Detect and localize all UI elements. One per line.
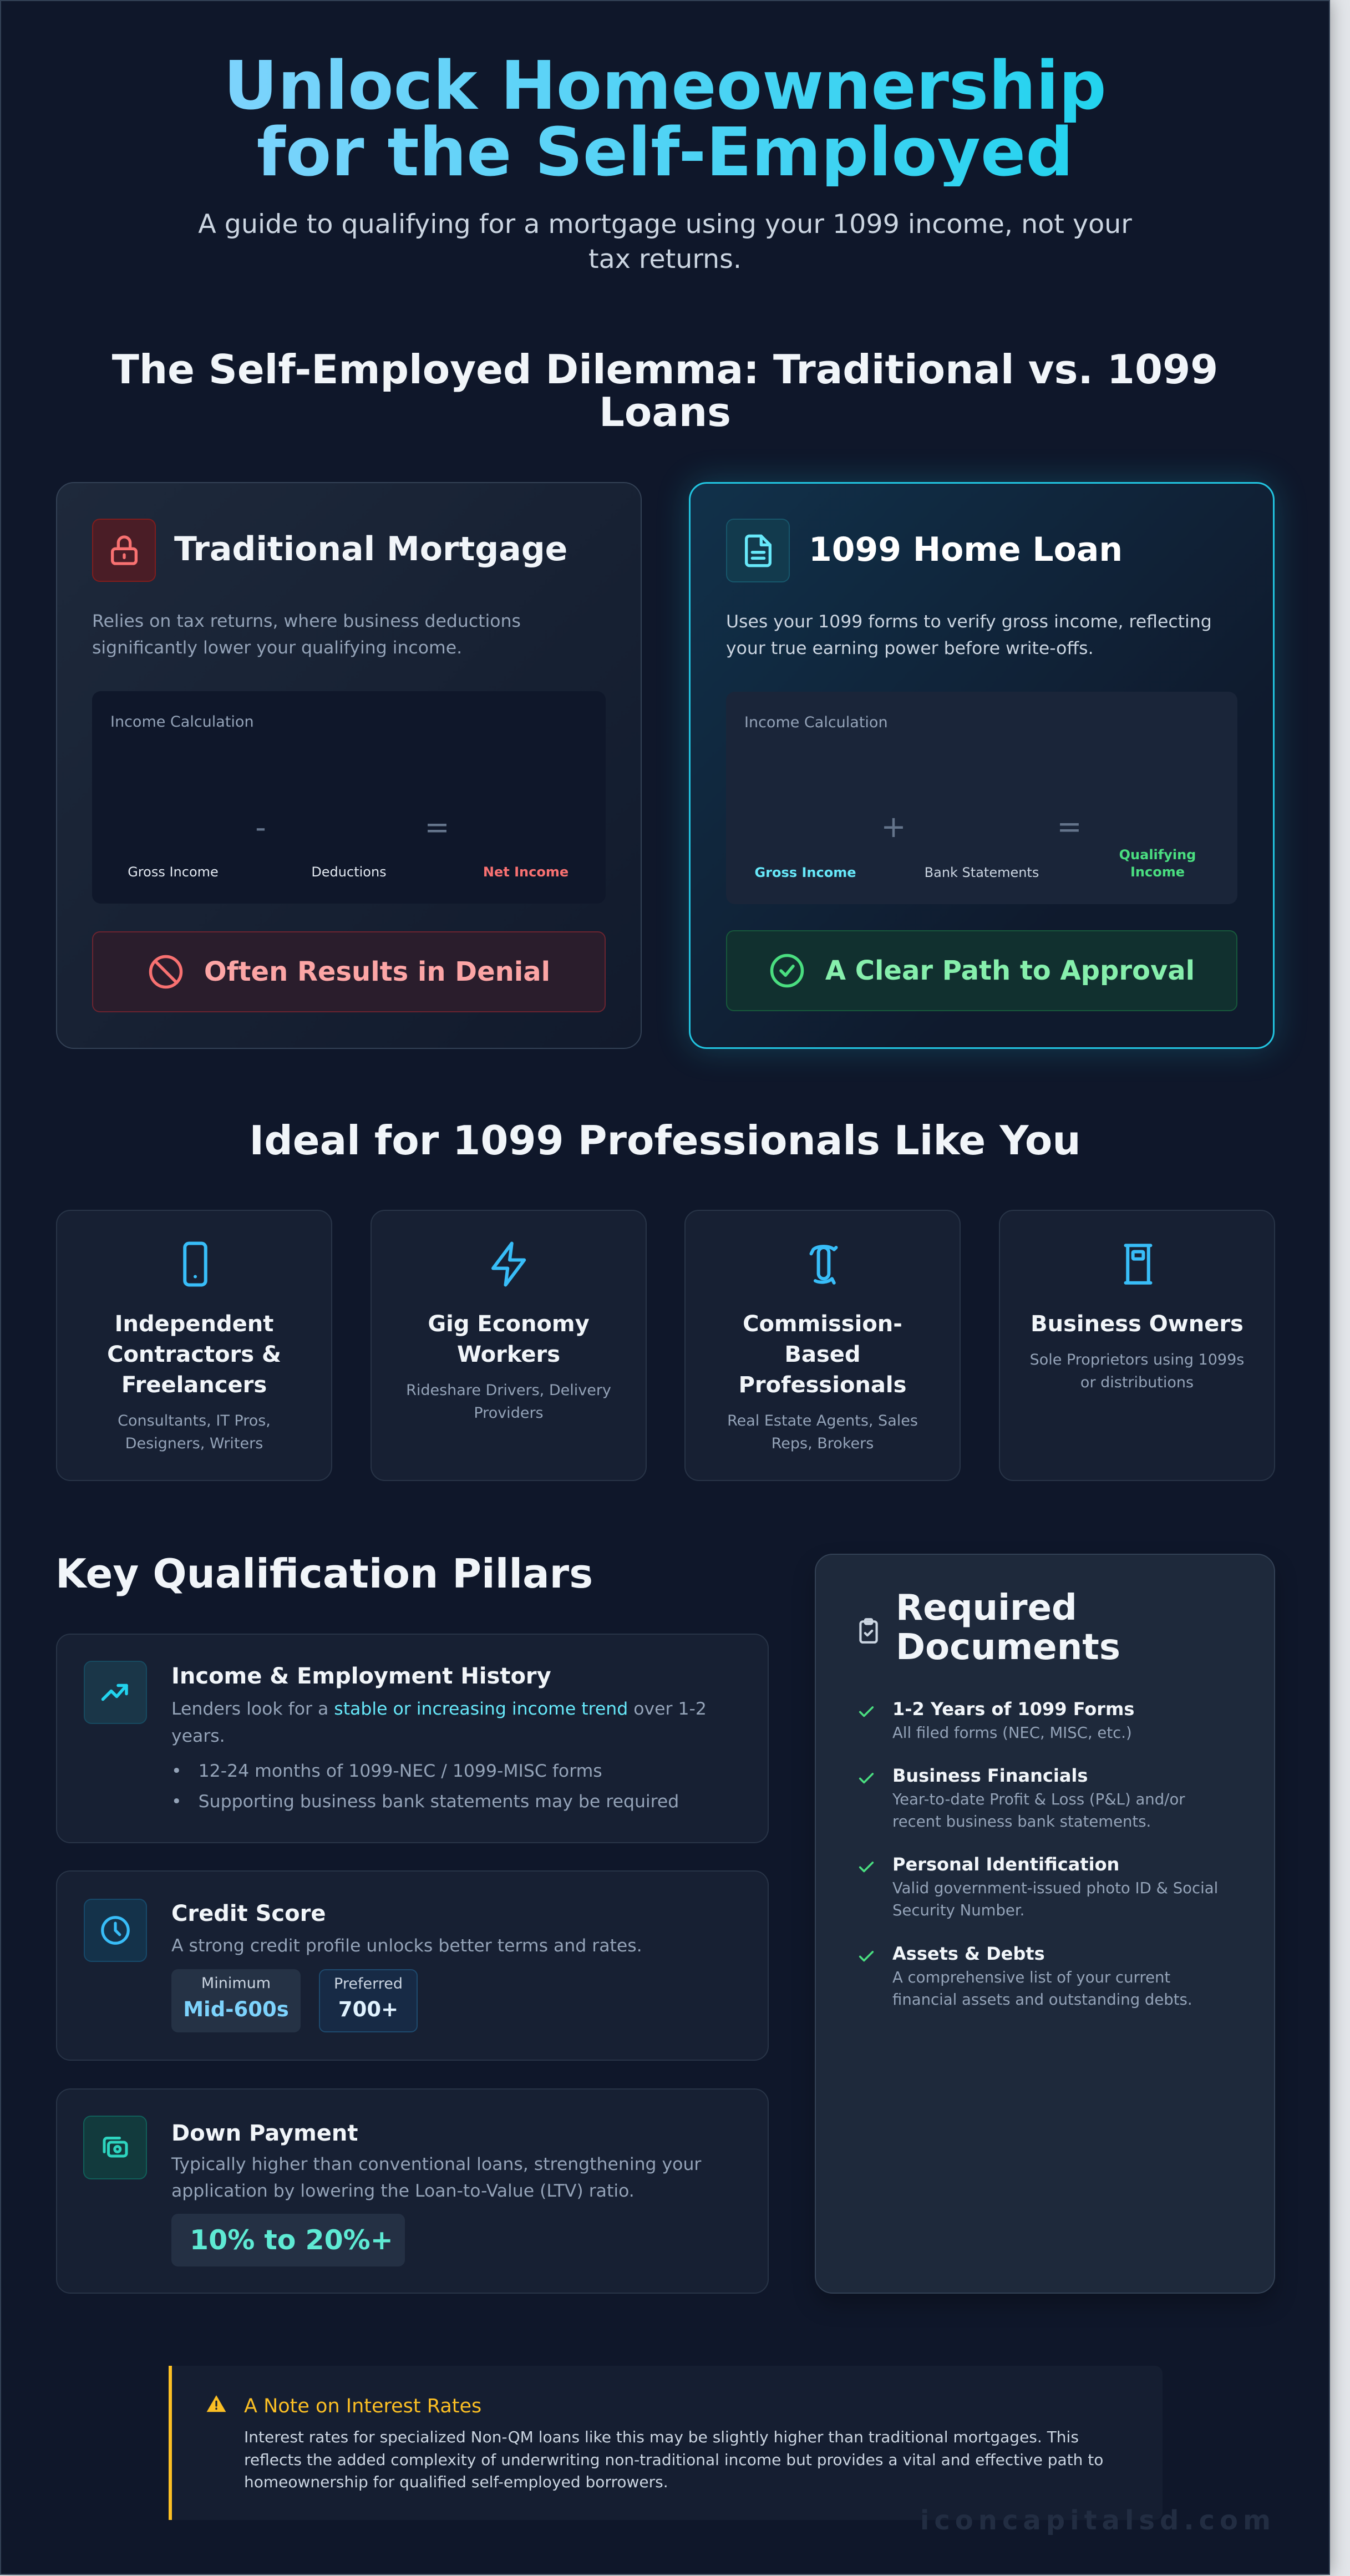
doc item 1 <box>859 1698 1134 1742</box>
heading: dilemma: The Self-Employed Dilemma: Traditional vs. 1099 Loans <box>112 346 1218 435</box>
callout: interest rate note: A Note on Interest Rates <box>244 2395 481 2417</box>
bullet list: • Supporting business bank statements may be required <box>171 1792 679 1812</box>
card: gig workers: Rideshare Drivers, Delivery Providers <box>406 1382 611 1422</box>
icon: clock <box>84 1899 147 1962</box>
income calculation box: Bank Statements <box>925 865 1039 880</box>
card: contractors: Independent Contractors & Freelancers <box>107 1311 281 1398</box>
bullet list: • 12-24 months of 1099-NEC / 1099-MISC forms <box>171 1761 602 1781</box>
card: commission: Commission-Based Professionals <box>739 1311 906 1398</box>
income calculation box: Income Calculation <box>744 714 888 731</box>
badge: minimum: Minimum <box>201 1975 271 1992</box>
callout: denial <box>92 931 606 1012</box>
icon: warning <box>206 2395 226 2412</box>
card title: 1099 Home Loan <box>809 530 1123 569</box>
card: business owners: Sole Proprietors using 1099s or distributions <box>1030 1351 1244 1391</box>
doc item 4 <box>859 1943 1192 2009</box>
heading: ideal professionals: Ideal for 1099 Professionals Like You <box>249 1117 1081 1164</box>
income calculation box: Gross Income <box>128 864 219 880</box>
doc item 3 <box>859 1854 1218 1919</box>
callout: interest rate note: Interest rates for specialized Non-QM loans like this may be slightly higher than traditional mortgages. This reflects the added complexity of underwriting non-traditional income but provides a vital and effective path to homeownership for qualified self-employed borrowers. <box>244 2428 1103 2491</box>
doc item 2 <box>859 1765 1185 1830</box>
panel: required documents <box>815 1554 1275 2294</box>
panel: required documents: Personal Identification <box>892 1854 1119 1875</box>
panel: required documents: All filed forms (NEC, MISC, etc.) <box>892 1724 1132 1742</box>
card: commission: Real Estate Agents, Sales Reps, Brokers <box>727 1412 918 1452</box>
title: for the Self-Employed <box>257 114 1073 191</box>
pillar: down payment: Typically higher than conventional loans, strengthening your application by lowering the Loan-to-Value (LTV) ratio. <box>171 2154 701 2201</box>
card: gig workers: Gig Economy Workers <box>428 1311 590 1367</box>
income calculation box: Gross Income <box>755 865 856 880</box>
title <box>224 48 1107 191</box>
panel title: Required <box>896 1588 1077 1629</box>
income calculation box: = <box>424 810 450 845</box>
panel title <box>896 1588 1120 1668</box>
icon: trending up <box>84 1661 147 1724</box>
pillar: income history: Income & Employment History <box>171 1664 551 1689</box>
icon: lock <box>92 519 156 582</box>
value box: 10% to 20%+ <box>190 2224 393 2256</box>
badge: preferred <box>319 1969 418 2032</box>
callout: denial: Often Results in Denial <box>204 956 550 987</box>
income calculation box: Income <box>1130 864 1185 880</box>
panel: required documents: Year-to-date Profit & Loss (P&L) and/or recent business bank statements. <box>892 1791 1185 1830</box>
panel: required documents: Business Financials <box>892 1765 1088 1786</box>
income calculation box: Qualifying <box>1119 847 1196 863</box>
badge: preferred: Preferred <box>334 1975 403 1992</box>
description: Uses your 1099 forms to verify gross income, reflecting your true earning power before write-offs. <box>726 612 1212 658</box>
icon: document <box>726 519 790 582</box>
pillar: credit score: A strong credit profile unlocks better terms and rates. <box>171 1936 642 1956</box>
callout: approval: A Clear Path to Approval <box>825 955 1195 986</box>
pillar: credit score: Credit Score <box>171 1901 326 1926</box>
icon: clipboard <box>859 1618 878 1644</box>
watermark: iconcapitalsd.com <box>920 2505 1276 2536</box>
panel title: Documents <box>896 1627 1120 1668</box>
income calculation box: Income Calculation <box>110 713 254 731</box>
icon: commission <box>810 1245 838 1285</box>
card: contractors: Consultants, IT Pros, Designers, Writers <box>118 1412 271 1452</box>
callout: approval <box>726 930 1237 1011</box>
income calculation box: = <box>1057 809 1082 844</box>
card: business owners <box>999 1210 1275 1481</box>
title: Unlock Homeownership <box>224 48 1107 125</box>
panel: required documents: 1-2 Years of 1099 Forms <box>892 1698 1134 1720</box>
description: Relies on tax returns, where business deductions significantly lower your qualifying income. <box>92 611 521 658</box>
card: contractors <box>56 1210 332 1481</box>
income calculation box: - <box>255 810 266 845</box>
pillar: down payment: Down Payment <box>171 2121 358 2146</box>
pillar: down payment <box>56 2088 769 2294</box>
pillar: income history <box>56 1634 769 1843</box>
badge: preferred: 700+ <box>338 1997 398 2021</box>
card: commission <box>684 1210 961 1481</box>
icon: cash <box>83 2116 147 2179</box>
icon: building <box>1124 1244 1153 1285</box>
panel: 1099 home loan <box>689 482 1275 1049</box>
icon: lightning <box>491 1241 526 1287</box>
icon: phone <box>183 1241 207 1287</box>
income calculation box: + <box>881 809 906 844</box>
pillar: income history: Lenders look for a stable or increasing income trend over 1-2 years. <box>171 1699 707 1746</box>
value box <box>171 2214 405 2266</box>
pillar: credit score <box>56 1870 769 2061</box>
panel: required documents: Assets & Debts <box>892 1943 1045 1964</box>
income calculation box: Net Income <box>483 864 569 880</box>
card title: Traditional Mortgage <box>174 530 567 569</box>
card: business owners: Business Owners <box>1031 1311 1244 1337</box>
badge: minimum: Mid-600s <box>183 1997 289 2021</box>
income calculation box: Deductions <box>311 864 387 880</box>
income calculation box <box>726 692 1237 904</box>
badge: minimum <box>171 1969 301 2032</box>
heading: key pillars: Key Qualification Pillars <box>55 1550 593 1597</box>
panel: required documents: A comprehensive list of your current financial assets and outstanding debts. <box>892 1969 1192 2009</box>
income calculation box <box>92 691 606 904</box>
subtitle: A guide to qualifying for a mortgage using your 1099 income, not your tax returns. <box>198 209 1132 275</box>
bullet list <box>171 1761 679 1812</box>
panel: traditional mortgage <box>56 482 642 1049</box>
card: gig workers <box>371 1210 647 1481</box>
panel: required documents: Valid government-issued photo ID & Social Security Number. <box>892 1879 1218 1919</box>
callout: interest rate note <box>169 2366 1163 2520</box>
